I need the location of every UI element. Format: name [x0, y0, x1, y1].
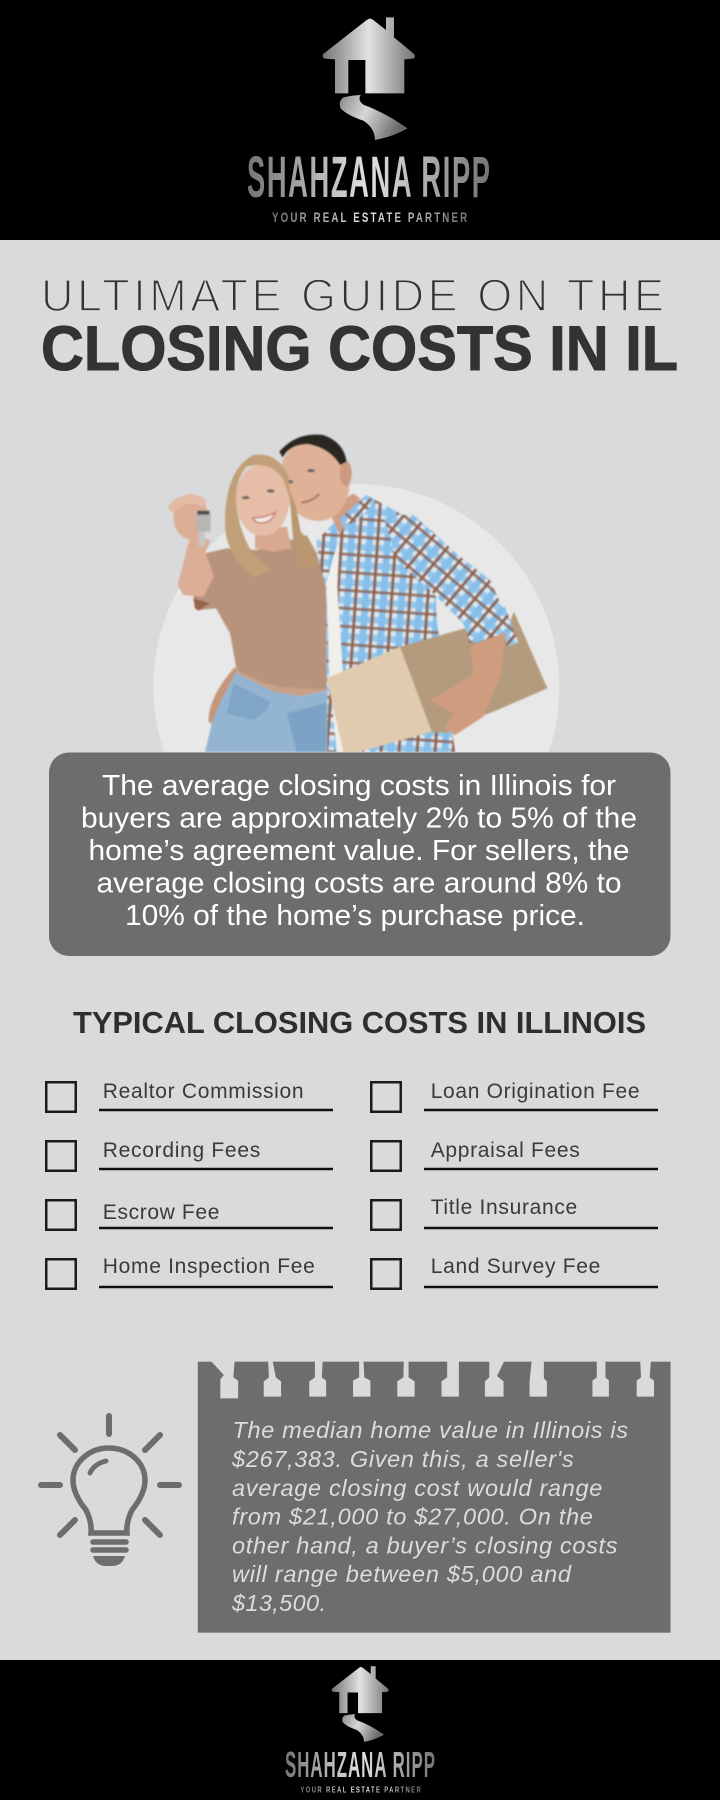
item: loan origination fee — [371, 1080, 658, 1112]
item: title insurance — [371, 1196, 658, 1230]
woman's midriff — [235, 671, 327, 696]
notepad text: will range between $5,000 and — [232, 1561, 572, 1587]
icon: light bulb — [41, 1416, 179, 1566]
footer logo tagline: YOUR REAL ESTATE PARTNER — [300, 1784, 421, 1795]
notepad text: other hand, a buyer’s closing costs — [232, 1532, 618, 1558]
title line one: ULTIMATE GUIDE ON THE — [41, 270, 664, 321]
man's cuff — [464, 607, 518, 647]
panel: average closing costs — [49, 752, 670, 956]
item: recording fees: Recording Fees — [103, 1139, 260, 1162]
notepad text: from $21,000 to $27,000. On the — [232, 1504, 593, 1530]
photo: couple with keys and box — [154, 433, 560, 752]
footer logo — [285, 1666, 435, 1795]
man's neck — [328, 493, 360, 535]
man's arm behind woman — [208, 666, 238, 724]
item: appraisal fees: Appraisal Fees — [431, 1139, 580, 1162]
item: land survey fee — [371, 1255, 658, 1289]
woman's shirt — [193, 535, 327, 695]
item: title insurance: Title Insurance — [431, 1196, 577, 1219]
summary text — [81, 770, 637, 932]
item: realtor commission: Realtor Commission — [103, 1080, 304, 1103]
shirt hem under box — [444, 731, 455, 751]
man's sleeve — [383, 515, 518, 645]
notepad text: average closing cost would range — [232, 1475, 602, 1501]
item: loan origination fee: Loan Origination Fee — [431, 1080, 640, 1103]
item: escrow fee: Escrow Fee — [103, 1201, 219, 1224]
man's forearm and hand — [429, 632, 505, 735]
item: recording fees — [46, 1139, 333, 1171]
notepad text: $267,383. Given this, a seller's — [231, 1446, 574, 1472]
summary text: The average closing costs in Illinois for — [102, 770, 616, 802]
summary text: 10% of the home’s purchase price. — [125, 900, 585, 932]
header band — [0, 0, 720, 240]
woman's jeans — [205, 673, 327, 752]
logo: house and name — [247, 17, 490, 225]
woman's hair right — [289, 490, 318, 570]
item: escrow fee — [46, 1200, 333, 1230]
couple figures — [173, 432, 547, 752]
checklist — [46, 1080, 658, 1289]
woman's hair left and crown — [225, 455, 291, 577]
title line two: CLOSING COSTS IN IL — [41, 314, 678, 384]
summary text: buyers are approximately 2% to 5% of the — [81, 802, 637, 834]
notepad text — [231, 1417, 628, 1616]
woman's hand with keys — [173, 494, 211, 547]
man's shirt body — [317, 495, 455, 752]
item: land survey fee: Land Survey Fee — [431, 1255, 600, 1278]
footer logo name: SHAHZANA RIPP — [285, 1745, 435, 1785]
title — [41, 270, 678, 384]
cardboard box — [327, 612, 547, 752]
woman's face — [236, 464, 289, 536]
woman's neck — [255, 527, 292, 552]
backdrop circle — [154, 484, 560, 752]
woman's facial features — [242, 489, 275, 523]
item: realtor commission — [46, 1080, 333, 1112]
man's undershirt — [325, 540, 344, 752]
logo name: SHAHZANA RIPP — [247, 145, 490, 210]
summary text: average closing costs are around 8% to — [96, 868, 622, 900]
logo tagline: YOUR REAL ESTATE PARTNER — [272, 211, 468, 225]
woman's sleeve cuff — [193, 598, 210, 611]
item: appraisal fees — [371, 1139, 658, 1171]
footer band — [0, 1660, 720, 1800]
item: home inspection fee: Home Inspection Fee — [103, 1255, 315, 1278]
footer icon: house with path — [332, 1666, 389, 1742]
man's head — [278, 433, 352, 522]
notepad text: The median home value in Illinois is — [232, 1417, 628, 1443]
item: home inspection fee — [46, 1255, 333, 1289]
notepad text: $13,500. — [231, 1590, 326, 1616]
woman's raised arm — [178, 537, 214, 597]
icon: house with path — [323, 17, 415, 140]
summary text: home’s agreement value. For sellers, the — [88, 835, 630, 867]
man's collar — [340, 495, 375, 527]
torn notepad shape — [198, 1360, 671, 1633]
panel: notepad with median home value — [198, 1360, 671, 1633]
heading: typical closing costs: TYPICAL CLOSING COSTS IN ILLINOIS — [73, 1005, 646, 1040]
